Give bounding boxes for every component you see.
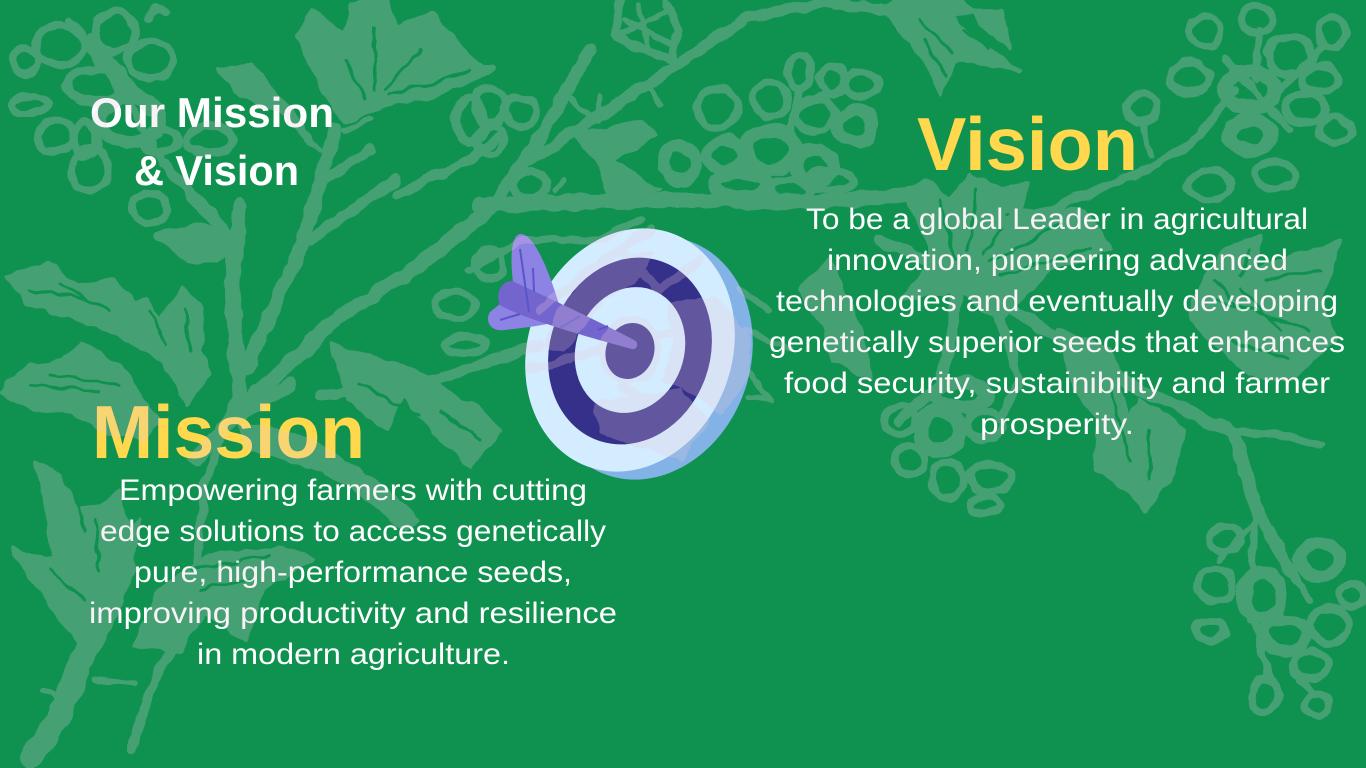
title [90,89,334,194]
text block: mission statement: edge solutions to access genetically [100,515,606,548]
text block: vision statement: food security, sustainibility and farmer [784,367,1330,400]
lower center flower cluster [884,383,1010,513]
text block: vision statement: To be a global Leader in agricultural [806,203,1308,236]
lower center leaves and stems [740,260,1185,510]
small left center cluster [435,87,546,353]
text block: mission statement: Empowering farmers with cutting [119,474,587,507]
text block: vision statement: prosperity. [980,408,1134,441]
title: & Vision [134,147,299,194]
text block: vision statement: technologies and eventually developing [776,285,1338,318]
right plant stems [1126,90,1320,620]
top flower fan [155,0,490,262]
text block: mission statement [89,474,617,671]
target dark ring [522,234,738,468]
left plant stems [32,120,540,757]
leaf hatch marks [30,285,480,600]
target inner ring [557,271,703,429]
heading: Vision: Vision [917,102,1138,186]
target bullseye [598,316,662,386]
heading: Mission: Mission [92,390,365,474]
left plant large leaves [0,263,500,652]
text block: vision statement: genetically superior seeds that enhances [769,326,1345,359]
text block: vision statement [769,203,1345,441]
text block: mission statement: pure, high-performance seeds, [134,556,572,589]
text block: mission statement: improving productivity and resilience [89,597,617,630]
overlay on target [530,230,748,458]
title: Our Mission [90,89,334,136]
top center leaf spray [880,0,1020,95]
top left flower cluster [12,8,234,223]
center top plant stems [470,3,915,270]
center top flower cluster [664,54,879,200]
target board side [510,207,786,509]
text block: mission statement: in modern agriculture. [197,638,510,671]
target outer ring [492,199,768,501]
right side leaves [1190,235,1340,380]
bottom right flower cluster [1196,527,1364,716]
top flower buds [615,0,678,60]
center right flower fan [880,175,1233,431]
text block: vision statement: innovation, pioneering advanced [827,244,1288,277]
top right flower cluster [1170,7,1351,199]
dart [488,234,637,349]
icon: target with dart [488,199,786,509]
